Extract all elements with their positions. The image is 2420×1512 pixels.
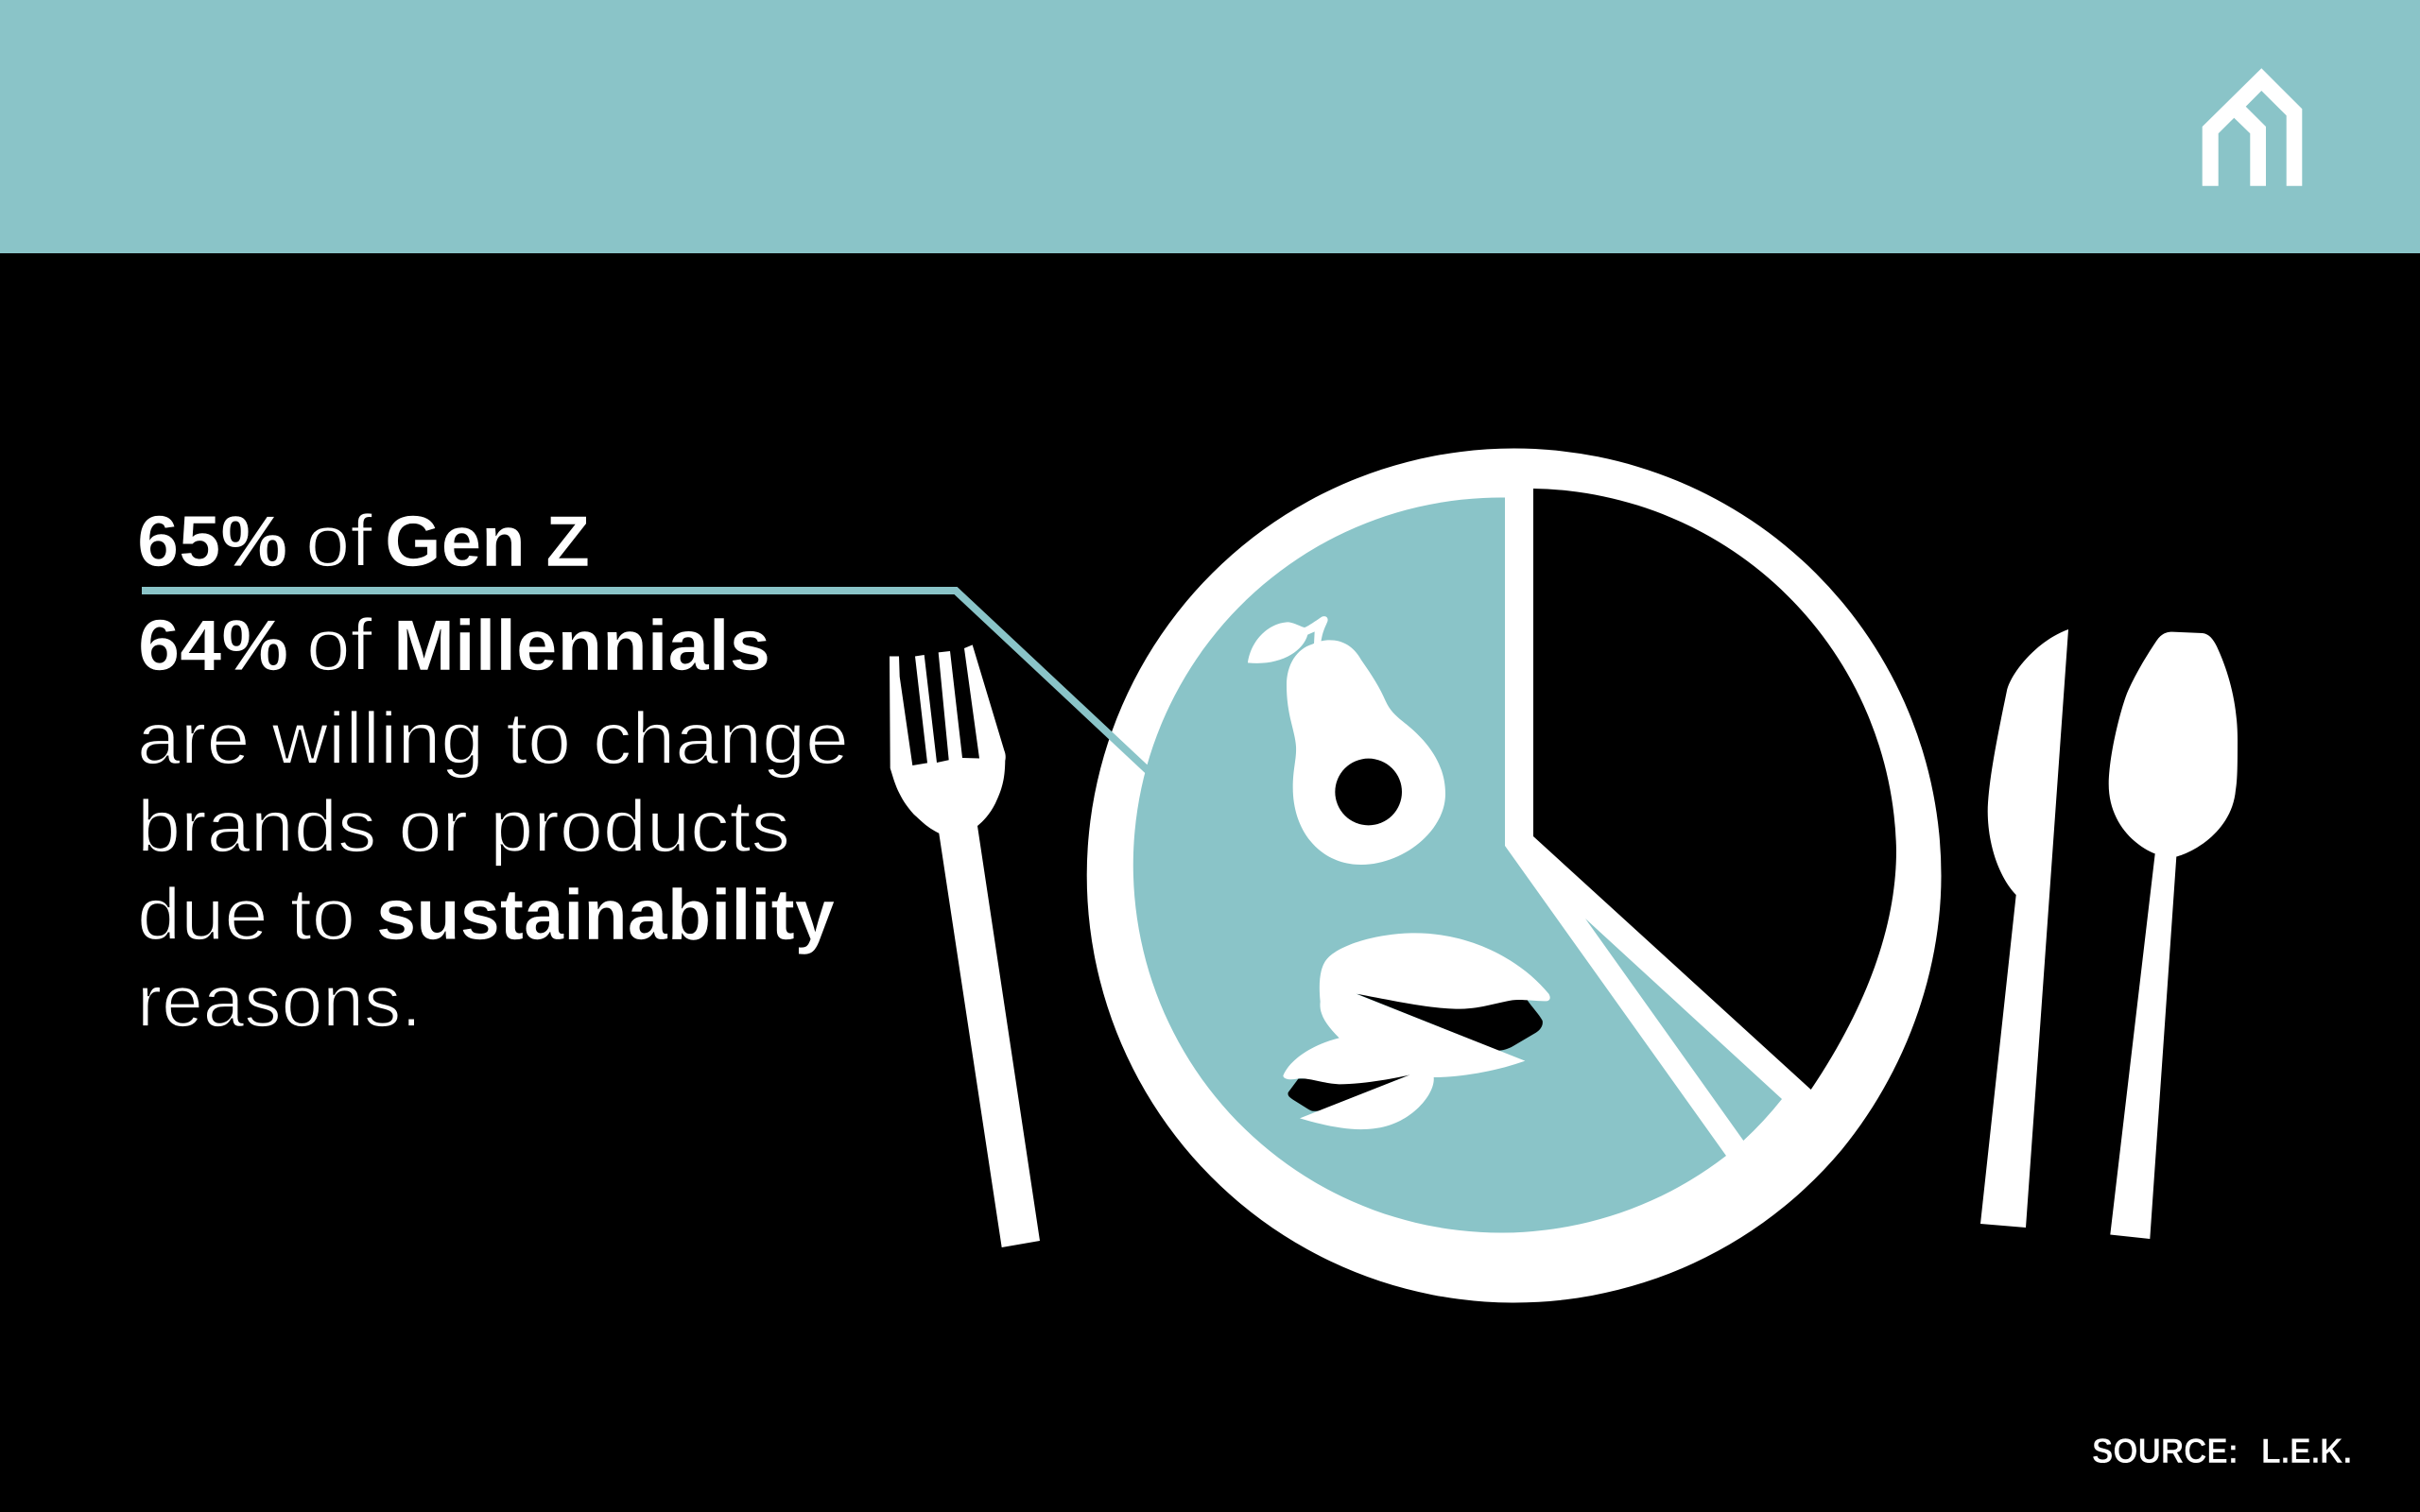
line: are willing to change: are willing to change: [137, 696, 849, 780]
line: 64% of Millennials: [138, 603, 770, 686]
icon: knife: [1980, 629, 2068, 1228]
line: 64% of Millennials: Millennials: [393, 606, 770, 686]
line: 64% of Millennials: 64%: [138, 606, 288, 686]
source note: [2092, 1432, 2352, 1470]
line: 65% of Gen Z: Gen Z: [385, 502, 590, 582]
line: 64% of Millennials: of: [306, 603, 372, 686]
header band: [0, 0, 2420, 253]
pie slice: willing to change 65%: [1133, 497, 1726, 1232]
icon: plate: [1087, 448, 1942, 1302]
pie slice: remainder: [1533, 489, 1896, 1090]
plate rim: [1087, 448, 1942, 1302]
line: due to sustainability: sustainability: [376, 875, 835, 955]
line: 65% of Gen Z: 65%: [137, 502, 287, 582]
line: due to sustainability: due to: [137, 872, 355, 955]
source note: SOURCE:: [2092, 1432, 2238, 1470]
line: 65% of Gen Z: [137, 499, 590, 582]
icon: avocado: [1248, 616, 1445, 865]
icon: spoon: [2109, 632, 2238, 1239]
source note: L.E.K.: [2261, 1432, 2352, 1470]
icon: house logo: [2203, 68, 2302, 186]
icon: fork: [890, 644, 1040, 1247]
pie slice: small wedge: [1585, 919, 1782, 1141]
line: brands or products: brands or products: [137, 784, 790, 868]
icon: pistachios: [1283, 933, 1550, 1129]
leader line: [142, 591, 1150, 772]
line: 65% of Gen Z: of: [305, 499, 372, 582]
line: due to sustainability: [137, 872, 835, 955]
text block: statistics: [137, 499, 849, 1042]
line: reasons.: reasons.: [137, 959, 422, 1042]
